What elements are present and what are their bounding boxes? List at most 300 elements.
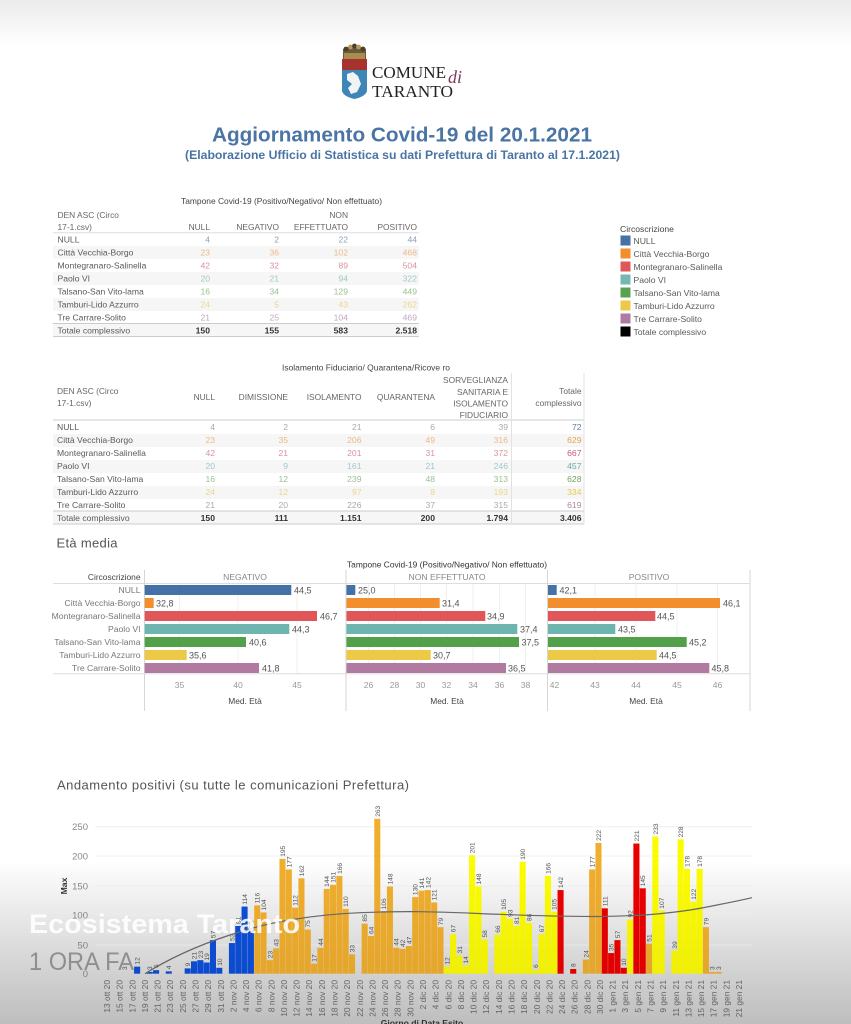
- x axis date labels: 30 dic 20: [595, 980, 605, 1014]
- bar value labels: 19: [204, 953, 211, 960]
- x axis date labels: 18 nov 20: [330, 980, 340, 1017]
- category labels: Tre Carrare-Solito: [72, 663, 141, 673]
- category labels: Circoscrizione: [88, 572, 141, 582]
- x axis date labels: 1 gen 21: [608, 980, 618, 1013]
- bar value labels: 106: [381, 898, 388, 909]
- x axis date labels: 15 ott 20: [115, 980, 125, 1013]
- bar value labels: 44: [394, 938, 401, 946]
- panel: NON EFFETTUATO: 25,0: [358, 586, 376, 596]
- row: Totale complessivo: [57, 513, 582, 523]
- bar value labels: 263: [375, 805, 382, 817]
- x axis date labels: 19 gen 21: [721, 980, 731, 1017]
- panel: NON EFFETTUATO: 38: [521, 680, 530, 690]
- bar value labels: 58: [482, 930, 489, 938]
- x axis date labels: 30 nov 20: [405, 980, 415, 1017]
- bar value labels: 8: [571, 963, 578, 967]
- bar value labels: 93: [508, 909, 514, 917]
- x axis date labels: 20 dic 20: [532, 980, 542, 1014]
- bar value labels: 141: [419, 877, 426, 889]
- bar value labels: 107: [659, 897, 666, 909]
- bar value labels: 67: [451, 925, 458, 932]
- row: NULL: NULL: [58, 234, 80, 244]
- row: Paolo VI: Paolo VI: [57, 461, 90, 471]
- chart: andamento positivi: [59, 805, 752, 1024]
- row: Città Vecchia-Borgo: 23: [205, 435, 215, 445]
- table header: Totale: [559, 386, 582, 396]
- bar value labels: 3: [716, 966, 723, 970]
- panel: POSITIVO: 45,2: [689, 638, 707, 648]
- row: Paolo VI: 161: [347, 461, 362, 471]
- x axis date labels: 28 dic 20: [582, 980, 592, 1014]
- bar value labels: 66: [495, 925, 502, 933]
- bar value labels: 151: [330, 871, 338, 883]
- row: Talsano-San Vito-lama: 129: [334, 286, 348, 296]
- row: Paolo VI: 20: [205, 461, 215, 471]
- watermark: 1 ORA FA: 1 ORA FA: [29, 948, 134, 976]
- bar value labels: 112: [293, 895, 300, 906]
- row: Città Vecchia-Borgo: 206: [347, 435, 362, 445]
- x axis date labels: 18 dic 20: [519, 980, 529, 1014]
- bar value labels: 228: [678, 826, 685, 837]
- panel: POSITIVO: POSITIVO: [629, 572, 670, 582]
- panel: NEGATIVO: Med. Età: [228, 696, 262, 706]
- row: Tamburi-Lido Azzurro: Tamburi-Lido Azzurro: [58, 300, 139, 310]
- table header: FIDUCIARIO: [460, 410, 508, 420]
- bar value labels: 44: [318, 938, 325, 946]
- x axis date labels: 13 ott 20: [102, 980, 112, 1013]
- table header: SORVEGLIANZA: [443, 375, 508, 385]
- x axis date labels: 5 gen 21: [633, 980, 643, 1013]
- row: Talsano-San Vito-lama: 16: [200, 286, 210, 296]
- table header: QUARANTENA: [377, 392, 435, 402]
- panel: NON EFFETTUATO: NON EFFETTUATO: [408, 572, 486, 582]
- row: Talsano-San Vito-lama: 628: [567, 474, 582, 484]
- x axis date labels: 3 gen 21: [620, 980, 630, 1013]
- bar value labels: 10: [621, 958, 628, 966]
- legend: Circoscrizione: Tre Carrare-Solito: [634, 314, 702, 324]
- row: Paolo VI: 9: [283, 461, 288, 471]
- table header: DIMISSIONE: [239, 392, 288, 402]
- icon: city crest: [342, 44, 367, 99]
- panel: POSITIVO: 44,5: [657, 612, 675, 622]
- row: Montegranaro-Salinella: Montegranaro-Salinella: [57, 448, 146, 458]
- y axis: 150: [72, 882, 88, 892]
- row: Tre Carrare-Solito: 469: [403, 312, 417, 322]
- row: Tamburi-Lido Azzurro: 5: [274, 300, 279, 310]
- x axis date labels: 7 gen 21: [646, 980, 656, 1013]
- row: Montegranaro-Salinella: 504: [403, 260, 417, 270]
- row: Montegranaro-Salinella: 667: [567, 448, 582, 458]
- row: NULL: 4: [210, 422, 215, 432]
- row: Montegranaro-Salinella: 372: [494, 448, 508, 458]
- panel: POSITIVO: 42: [550, 680, 559, 690]
- bar value labels: 43: [274, 939, 281, 946]
- bar value labels: 142: [425, 877, 432, 888]
- x axis date labels: 24 dic 20: [557, 980, 567, 1014]
- bar value labels: 12: [135, 957, 142, 965]
- category labels: Tamburi-Lido Azzurro: [59, 650, 141, 660]
- bar value labels: 144: [324, 876, 331, 887]
- row: NULL: [57, 422, 582, 432]
- category labels: Montegranaro-Salinella: [52, 611, 141, 621]
- bar value labels: 52: [229, 933, 236, 941]
- bar value labels: 75: [305, 920, 312, 928]
- table header: complessivo: [535, 398, 582, 408]
- x axis date labels: 23 ott 20: [165, 980, 175, 1013]
- panel: NEGATIVO: 40,6: [249, 638, 267, 648]
- bars: [134, 819, 722, 974]
- panel: NEGATIVO: 35: [175, 680, 184, 690]
- bar value labels: 110: [343, 896, 350, 907]
- row: NULL: 44: [407, 234, 417, 244]
- row: Talsano-San Vito-lama: 313: [494, 474, 508, 484]
- row: Tre Carrare-Solito: 25: [269, 312, 279, 322]
- bar value labels: 47: [406, 936, 413, 944]
- bar value labels: 35: [609, 943, 616, 951]
- panel: POSITIVO: 43: [590, 680, 600, 690]
- legend: Circoscrizione: Circoscrizione: [620, 224, 674, 234]
- x axis date labels: [102, 980, 744, 1017]
- x axis date labels: 4 dic 20: [431, 980, 441, 1009]
- heading: Andamento positivi: Andamento positivi (su tutte le comunicazioni Prefettura): [57, 778, 409, 792]
- x axis date labels: 17 gen 21: [709, 980, 719, 1017]
- bar value labels: 222: [596, 830, 603, 841]
- subtitle: (Elaborazione Ufficio di Statistica su dati Prefettura di Taranto al 17.1.2021): [185, 148, 620, 162]
- x axis date labels: 15 gen 21: [696, 980, 706, 1017]
- panel: POSITIVO: 44: [631, 680, 641, 690]
- row: NULL: NULL: [57, 422, 79, 432]
- row: Tre Carrare-Solito: 20: [278, 500, 288, 510]
- x axis date labels: 8 dic 20: [456, 980, 466, 1009]
- bar value labels: 31: [457, 946, 464, 953]
- row: Totale complessivo: [58, 326, 417, 336]
- table header: DEN ASC (Circo: [57, 386, 119, 396]
- row: Tre Carrare-Solito: 104: [334, 312, 348, 322]
- row: Tamburi-Lido Azzurro: 12: [278, 487, 288, 497]
- bar value labels: 221: [634, 830, 641, 842]
- row: Montegranaro-Salinella: Montegranaro-Salinella: [58, 260, 147, 270]
- x axis date labels: 6 nov 20: [254, 980, 264, 1012]
- row: Paolo VI: 21: [269, 274, 279, 284]
- x axis date labels: 10 nov 20: [279, 980, 289, 1017]
- row: Talsano-San Vito-lama: 48: [425, 474, 435, 484]
- row: Tamburi-Lido Azzurro: 43: [338, 300, 348, 310]
- bar value labels: 122: [691, 888, 698, 900]
- row: Tre Carrare-Solito: Tre Carrare-Solito: [58, 312, 126, 322]
- panel: NON EFFETTUATO: 36,5: [508, 664, 526, 674]
- row: Montegranaro-Salinella: [58, 260, 417, 270]
- x axis date labels: 11 gen 21: [671, 980, 681, 1017]
- row: Talsano-San Vito-lama: 16: [205, 474, 215, 484]
- panel: NON EFFETTUATO: 34,9: [487, 612, 505, 622]
- panel: NON EFFETTUATO: Med. Età: [430, 696, 464, 706]
- bar value labels: 23: [267, 951, 274, 958]
- row: Totale complessivo: 150: [201, 513, 215, 523]
- row: NULL: 21: [352, 422, 362, 432]
- y axis: 100: [72, 910, 88, 922]
- panel: NEGATIVO: 44,5: [294, 586, 312, 596]
- panel: NEGATIVO: 45: [292, 680, 302, 690]
- x axis date labels: 22 dic 20: [544, 980, 554, 1014]
- row: Tre Carrare-Solito: Tre Carrare-Solito: [57, 500, 126, 510]
- row: Totale complessivo: Totale complessivo: [57, 513, 130, 523]
- table header: 17-1.csv): [57, 398, 92, 408]
- panel: NEGATIVO: 44,3: [292, 624, 310, 634]
- bar value labels: 6: [533, 964, 540, 968]
- y axis: 250: [72, 822, 88, 833]
- bar value labels: 201: [470, 842, 477, 853]
- table title: Tampone Covid-19 (Positivo/Negativo/ Non effettuato): [181, 196, 382, 206]
- bar value labels: 10: [217, 958, 224, 966]
- y axis: 200: [72, 852, 88, 862]
- legend: Circoscrizione: Paolo VI: [634, 275, 666, 285]
- x axis date labels: 16 dic 20: [506, 980, 516, 1014]
- bars: blue period: [134, 907, 254, 974]
- row: Città Vecchia-Borgo: 49: [425, 435, 435, 445]
- bar value labels: 12: [444, 957, 451, 965]
- bars: yellow periods: [444, 836, 703, 974]
- bar value labels: 105: [501, 899, 508, 910]
- panel: POSITIVO: 45: [672, 680, 682, 690]
- row: Talsano-San Vito-lama: 34: [269, 286, 279, 296]
- bar value labels: 177: [286, 856, 293, 867]
- x axis date labels: 17 ott 20: [127, 980, 137, 1013]
- x axis date labels: 10 dic 20: [469, 980, 479, 1014]
- row: NULL: [58, 234, 417, 244]
- bar value labels: 130: [413, 884, 420, 895]
- category labels: Talsano-San Vito-lama: [54, 637, 141, 647]
- x axis date labels: 8 nov 20: [266, 980, 276, 1012]
- panel: table isolamento: [53, 362, 584, 524]
- panel: POSITIVO: [548, 572, 741, 706]
- bars: orange periods: [254, 819, 722, 974]
- logo wordmark: [372, 63, 462, 101]
- bar value labels: 162: [299, 865, 306, 876]
- table header: DEN ASC (Circo: [58, 210, 119, 220]
- table header: [58, 210, 417, 232]
- bar value labels: 3: [122, 966, 129, 970]
- panel: POSITIVO: 43,5: [618, 624, 636, 634]
- bar value labels: 57: [210, 930, 217, 938]
- panel: POSITIVO: 45,8: [712, 664, 729, 674]
- row: Talsano-San Vito-lama: [58, 286, 417, 296]
- bar value labels: 116: [255, 893, 262, 903]
- panel: NON EFFETTUATO: 32: [442, 680, 451, 690]
- bar value labels: 104: [261, 899, 268, 910]
- panel: NON EFFETTUATO: 37,4: [520, 624, 538, 634]
- table header: NULL: [194, 392, 215, 402]
- row: Paolo VI: 322: [403, 274, 417, 284]
- legend: Circoscrizione: Totale complessivo: [634, 327, 706, 337]
- category labels: [52, 572, 141, 673]
- row: Talsano-San Vito-lama: 449: [403, 286, 417, 296]
- row: Totale complessivo: 150: [196, 326, 210, 336]
- panel: NON EFFETTUATO: 37,5: [522, 638, 539, 648]
- panel: POSITIVO: 44,5: [659, 650, 677, 660]
- row: Totale complessivo: Totale complessivo: [58, 326, 130, 336]
- row: Paolo VI: 20: [200, 274, 210, 284]
- bar value labels: 9: [185, 962, 192, 966]
- panel: POSITIVO: 46: [713, 680, 722, 690]
- panel: NON EFFETTUATO: 36: [495, 680, 504, 690]
- row: Tamburi-Lido Azzurro: Tamburi-Lido Azzurro: [57, 487, 138, 497]
- bar value labels: 92: [628, 910, 635, 918]
- bar value labels: 81: [514, 916, 521, 924]
- bar value labels: 67: [539, 925, 546, 932]
- row: Tamburi-Lido Azzurro: [58, 300, 417, 310]
- table header: NEGATIVO: [236, 222, 279, 232]
- title: Aggiornamento Covid-19 del 20.1.2021: [212, 124, 592, 146]
- x axis date labels: 14 nov 20: [304, 980, 314, 1017]
- x axis date labels: 20 nov 20: [342, 980, 352, 1017]
- row: Città Vecchia-Borgo: [58, 248, 417, 258]
- row: Città Vecchia-Borgo: 102: [334, 248, 348, 258]
- row: Tamburi-Lido Azzurro: 8: [430, 487, 435, 497]
- legend: Circoscrizione: Talsano-San Vito-lama: [634, 288, 720, 298]
- x axis date labels: 2 nov 20: [228, 980, 238, 1012]
- row: Tamburi-Lido Azzurro: 24: [200, 300, 210, 310]
- row: Città Vecchia-Borgo: 468: [403, 248, 417, 258]
- bar value labels: 4: [166, 965, 173, 969]
- panel: NEGATIVO: 41,8: [262, 664, 280, 674]
- row: Totale complessivo: 583: [334, 326, 348, 336]
- x axis date labels: 19 ott 20: [140, 980, 150, 1013]
- category labels: Città Vecchia-Borgo: [65, 598, 141, 608]
- table header: POSITIVO: [377, 222, 417, 232]
- bar value labels: 145: [640, 875, 647, 886]
- row: Città Vecchia-Borgo: Città Vecchia-Borgo: [57, 435, 133, 445]
- category labels: Paolo VI: [108, 624, 140, 634]
- x axis date labels: 25 ott 20: [178, 980, 188, 1013]
- x axis date labels: 22 nov 20: [355, 980, 365, 1017]
- bar value labels: 178: [684, 856, 691, 867]
- category labels: NULL: [119, 585, 141, 595]
- row: Tre Carrare-Solito: 37: [425, 500, 435, 510]
- bar value labels: 177: [590, 856, 597, 867]
- row: NULL: 2: [274, 234, 279, 244]
- bar value labels: 79: [438, 918, 445, 925]
- x axis date labels: 26 nov 20: [380, 980, 390, 1017]
- bar value labels: 86: [526, 913, 533, 921]
- bar value labels: 24: [583, 950, 590, 958]
- legend: Circoscrizione: [620, 224, 723, 337]
- y axis: 50: [77, 940, 88, 952]
- table header: ISOLAMENTO: [307, 392, 362, 402]
- row: Montegranaro-Salinella: [57, 448, 582, 458]
- panel: POSITIVO: Med. Età: [629, 696, 663, 706]
- table header: ISOLAMENTO: [453, 398, 508, 408]
- panel: POSITIVO: 42,1: [560, 586, 577, 596]
- table header: 17-1.csv): [58, 222, 92, 232]
- table header: SANITARIA E: [457, 387, 508, 397]
- row: Tre Carrare-Solito: [57, 500, 582, 510]
- panel: NEGATIVO: 40: [233, 680, 243, 690]
- bar value labels: 17: [312, 954, 319, 962]
- row: Tamburi-Lido Azzurro: [57, 487, 582, 497]
- bar value labels: 42: [400, 939, 407, 947]
- bar value labels: 85: [362, 914, 369, 922]
- row: Tre Carrare-Solito: 21: [205, 500, 215, 510]
- row: Montegranaro-Salinella: 42: [200, 260, 210, 270]
- x axis date labels: 21 gen 21: [734, 980, 744, 1017]
- bar value labels: 195: [280, 845, 287, 857]
- bar value labels: 178: [697, 856, 704, 867]
- row: NULL: 22: [338, 234, 348, 244]
- row: Talsano-San Vito-lama: [57, 474, 582, 484]
- row: Montegranaro-Salinella: 32: [269, 260, 279, 270]
- bar value labels: 166: [337, 863, 344, 874]
- row: Totale complessivo: 155: [265, 326, 279, 336]
- trend curve: [145, 898, 752, 974]
- row: Città Vecchia-Borgo: 23: [200, 248, 210, 258]
- panel: NON EFFETTUATO: [346, 572, 539, 706]
- row: Talsano-San Vito-lama: Talsano-San Vito-lama: [58, 286, 144, 296]
- y axis: [59, 822, 88, 980]
- bar value labels: 166: [545, 863, 552, 874]
- y axis: 0: [83, 969, 88, 980]
- row: Talsano-San Vito-lama: 239: [347, 474, 362, 484]
- row: Paolo VI: 246: [494, 461, 508, 471]
- bar value labels: 105: [552, 899, 559, 910]
- row: Montegranaro-Salinella: 89: [338, 260, 348, 270]
- x axis date labels: 31 ott 20: [216, 980, 226, 1013]
- x axis date labels: 16 nov 20: [317, 980, 327, 1017]
- x axis date labels: 28 nov 20: [393, 980, 403, 1017]
- row: Totale complessivo: 1.151: [340, 513, 362, 523]
- row: Montegranaro-Salinella: 21: [278, 448, 288, 458]
- chart title: Tampone Covid-19 (Positivo/Negativo/ Non effettuato): [347, 560, 547, 570]
- bar value labels: 75: [248, 920, 255, 928]
- bar value labels: 190: [520, 848, 527, 860]
- row: NULL: 72: [572, 422, 582, 432]
- bar value labels: 3: [147, 966, 154, 970]
- row: Talsano-San Vito-lama: Talsano-San Vito-lama: [57, 474, 144, 484]
- logo: Comune di Taranto: [342, 44, 462, 101]
- row: Paolo VI: [58, 274, 417, 284]
- row: Città Vecchia-Borgo: 316: [494, 435, 508, 445]
- row: Paolo VI: 94: [338, 274, 348, 284]
- row: Totale complessivo: 200: [421, 513, 435, 523]
- row: NULL: 39: [498, 422, 508, 432]
- row: Montegranaro-Salinella: 31: [425, 448, 435, 458]
- legend: Circoscrizione: Tamburi-Lido Azzurro: [634, 301, 715, 311]
- bar value labels: [122, 805, 723, 970]
- panel: NON EFFETTUATO: 30,7: [433, 650, 451, 660]
- row: Città Vecchia-Borgo: 35: [278, 435, 288, 445]
- y axis: Max: [59, 877, 69, 894]
- bar value labels: 111: [602, 896, 609, 906]
- bar value labels: 81: [236, 916, 243, 924]
- x axis date labels: 2 dic 20: [418, 980, 428, 1009]
- panel: NON EFFETTUATO: 30: [416, 680, 425, 690]
- row: Tre Carrare-Solito: 226: [347, 500, 362, 510]
- bar value labels: 79: [703, 918, 710, 925]
- bar value labels: 3: [710, 966, 717, 970]
- row: Città Vecchia-Borgo: Città Vecchia-Borgo: [58, 248, 134, 258]
- row: Tamburi-Lido Azzurro: 262: [403, 300, 417, 310]
- row: Totale complessivo: 1.794: [486, 513, 508, 523]
- panel: NON EFFETTUATO: 26: [364, 680, 373, 690]
- row: NULL: 2: [283, 422, 288, 432]
- panel: NEGATIVO: 32,8: [156, 598, 174, 608]
- row: Paolo VI: 457: [567, 461, 582, 471]
- row: Totale complessivo: 2.518: [395, 326, 417, 336]
- row: Paolo VI: [57, 461, 582, 471]
- row: Tamburi-Lido Azzurro: 97: [352, 487, 362, 497]
- x axis date labels: 6 dic 20: [443, 980, 453, 1009]
- panel: NEGATIVO: [145, 572, 338, 706]
- row: Tre Carrare-Solito: [58, 312, 417, 322]
